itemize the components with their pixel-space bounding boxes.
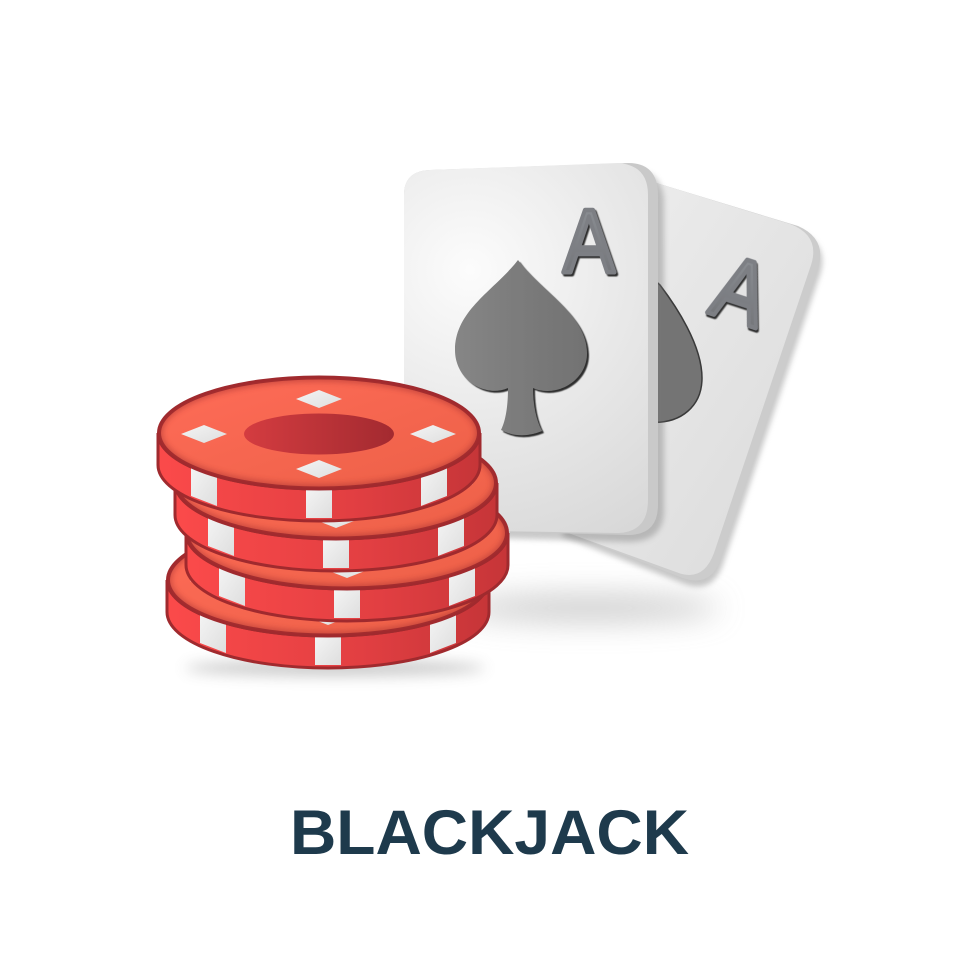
back playing card	[560, 178, 822, 587]
back card spade	[648, 274, 702, 422]
front playing card	[404, 163, 658, 535]
chip stack	[158, 378, 508, 668]
chip 1 (top)	[158, 378, 480, 521]
title: BLACKJACK	[290, 798, 689, 868]
illustration: blackjack icon with title	[156, 163, 825, 854]
chip 4 (bottom)	[167, 524, 489, 668]
chip 2	[175, 428, 497, 571]
chip 3	[186, 478, 508, 621]
back card letter A: A	[701, 234, 781, 346]
ground shadow under chips	[185, 660, 485, 676]
shadow cast by front card	[430, 169, 664, 542]
front card letter A: A	[563, 191, 615, 291]
ground shadow under cards	[460, 595, 720, 621]
front card spade	[455, 260, 587, 435]
